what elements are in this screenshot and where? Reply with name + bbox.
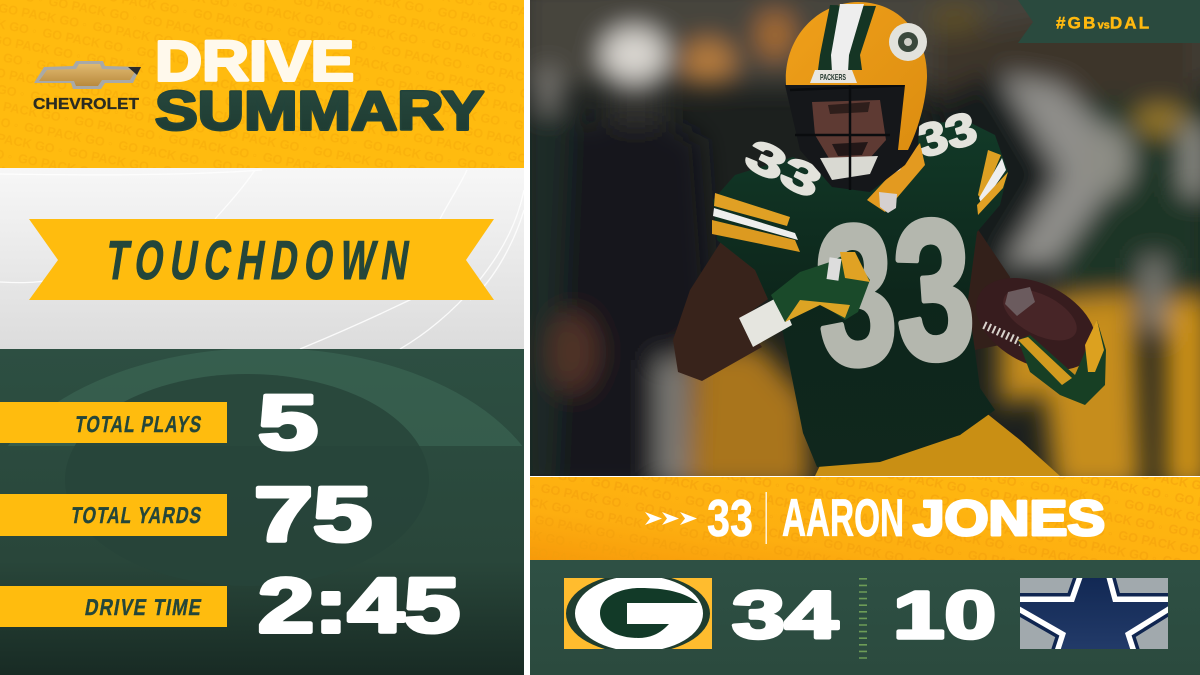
collar bbox=[867, 143, 925, 212]
shoulder numbers: 33 bbox=[738, 130, 829, 208]
icon: cowboys star logo bbox=[1020, 578, 1168, 649]
panel: drive summary header bbox=[0, 0, 524, 168]
hashtag tag bbox=[1018, 0, 1200, 43]
icon: packers G logo bbox=[564, 578, 712, 649]
heading: drive: DRIVE bbox=[155, 30, 354, 94]
left glove bbox=[771, 252, 870, 322]
panel: player name bar bbox=[530, 477, 1200, 560]
stat: drive time: 2:45 bbox=[258, 563, 460, 649]
text: jersey number: 33 bbox=[707, 490, 753, 548]
player bbox=[673, 2, 1111, 476]
text: player first name: AARON bbox=[782, 489, 904, 548]
right arm bbox=[968, 230, 1010, 350]
helmet: PACKERS bbox=[820, 73, 846, 82]
text: touchdown: TOUCHDOWN bbox=[102, 229, 421, 291]
stat: total plays bbox=[0, 380, 318, 466]
player: 33 bbox=[910, 101, 982, 168]
stat: drive time: DRIVE TIME bbox=[83, 594, 205, 620]
blurred sideline background bbox=[520, 0, 1200, 490]
facemask and face bbox=[785, 80, 922, 192]
panel: photo of player bbox=[520, 0, 1200, 490]
icon: chevrolet bowtie logo bbox=[34, 61, 141, 89]
stat: total plays: 5 bbox=[258, 380, 318, 466]
jersey number 33: 33 bbox=[810, 177, 981, 408]
wrist tape bbox=[739, 296, 792, 347]
hashtag tag: #GBvsDAL bbox=[1056, 14, 1151, 32]
helmet bumper bbox=[810, 70, 857, 83]
right glove bbox=[1018, 320, 1106, 405]
text: cowboys score: 10 bbox=[893, 578, 996, 653]
left arm bbox=[673, 242, 768, 381]
stat: total yards: 75 bbox=[254, 472, 372, 558]
icon: G logo watermark bbox=[8, 349, 522, 446]
yard line hash marks bbox=[859, 578, 867, 661]
helmet bbox=[786, 2, 927, 150]
helmet G decal bbox=[889, 23, 927, 61]
icon: chevron arrows bbox=[645, 512, 697, 525]
gold pants bbox=[815, 412, 1060, 476]
text: player last name: JONES bbox=[913, 492, 1105, 546]
panel: score bbox=[530, 560, 1200, 675]
panel: drive stats bbox=[0, 348, 550, 675]
text: chevrolet wordmark: CHEVROLET bbox=[33, 96, 140, 113]
stat: total plays: TOTAL PLAYS bbox=[73, 411, 205, 437]
stat: total yards: TOTAL YARDS bbox=[69, 502, 205, 528]
chin strap bbox=[820, 156, 878, 180]
stat: drive time bbox=[0, 563, 460, 649]
football bbox=[982, 278, 1094, 370]
jersey bbox=[713, 120, 1008, 467]
ribbon banner bbox=[29, 219, 494, 300]
sleeve stripes bbox=[712, 150, 1008, 252]
NFL shield bbox=[879, 192, 897, 213]
heading: summary: SUMMARY bbox=[155, 80, 484, 142]
text: packers score: 34 bbox=[732, 578, 838, 653]
panel: touchdown bbox=[0, 168, 524, 349]
stat: total yards bbox=[0, 472, 372, 558]
